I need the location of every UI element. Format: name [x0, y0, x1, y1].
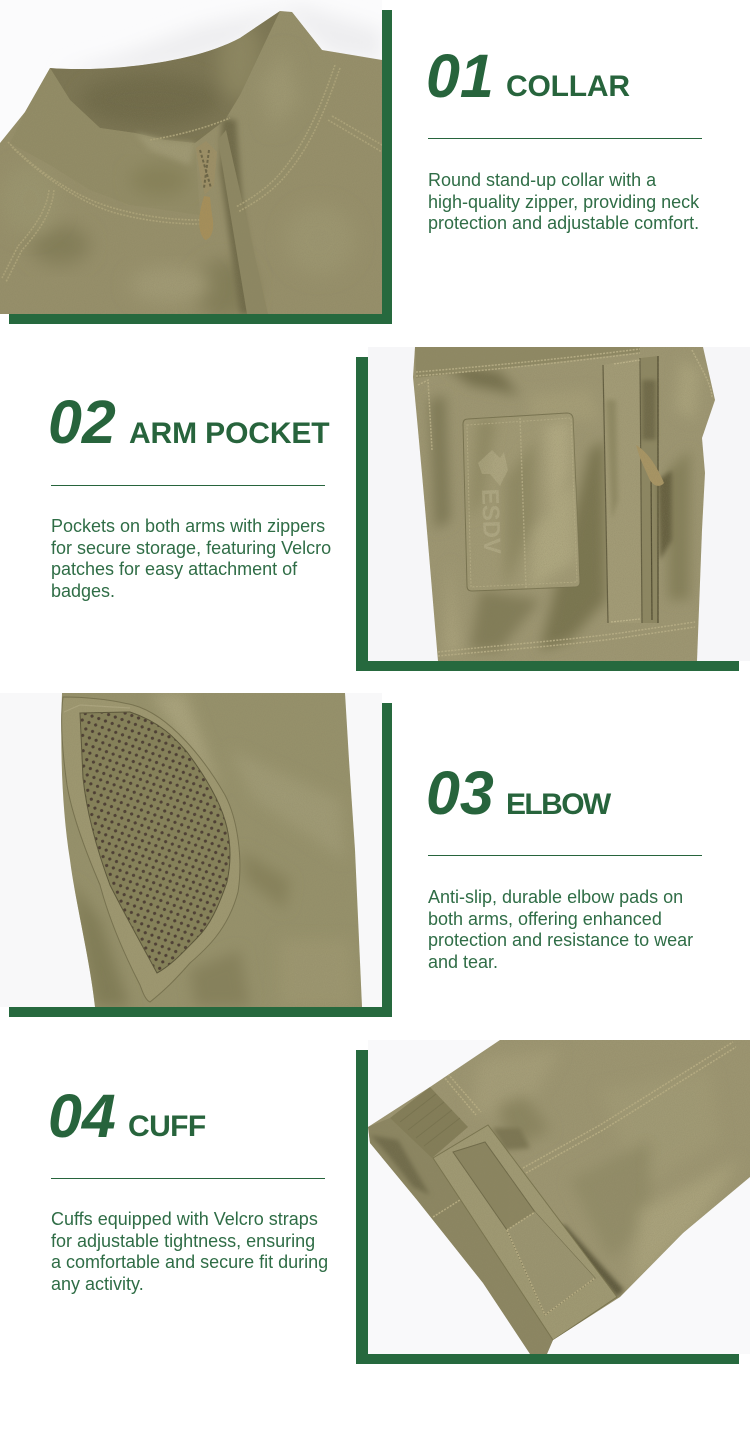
shadow beside strap	[557, 1225, 624, 1297]
section 3 text: elbow	[426, 759, 702, 972]
panel: collar photo	[0, 3, 392, 324]
photo: cuff with velcro strap	[368, 1040, 750, 1354]
description: arm pocket	[51, 516, 331, 601]
description: collar: high-quality zipper, providing neck	[428, 192, 699, 212]
logo mark	[478, 450, 508, 486]
description: arm pocket: for secure storage, featuring Velcro	[51, 538, 331, 558]
section 4 text: cuff	[48, 1082, 328, 1294]
description: elbow: both arms, offering enhanced	[428, 908, 662, 928]
description: arm pocket: badges.	[51, 580, 115, 600]
elastic band	[390, 1087, 468, 1158]
description: elbow	[428, 887, 693, 972]
number 02: 02	[48, 388, 116, 456]
heading: arm pocket: ARM POCKET	[129, 417, 329, 450]
elbow pad binding	[62, 697, 240, 1002]
description: collar: protection and adjustable comfort.	[428, 213, 699, 233]
stitching	[433, 1042, 736, 1315]
number 03: 03	[426, 759, 494, 827]
number 01: 01	[426, 42, 494, 110]
description: collar: Round stand-up collar with a	[428, 170, 656, 190]
photo: collar with zipper	[0, 3, 382, 314]
description: cuff: any activity.	[51, 1274, 144, 1294]
section 2 text: arm pocket	[48, 388, 331, 601]
patch	[463, 413, 580, 591]
green frame: arm pocket	[356, 357, 739, 671]
description: collar	[428, 170, 700, 233]
description: elbow: protection and resistance to wear	[428, 930, 693, 950]
number 04: 04	[48, 1082, 116, 1150]
elbow pad mesh with dots	[80, 712, 230, 973]
description: arm pocket: Pockets on both arms with zippers	[51, 516, 325, 536]
description: cuff: for adjustable tightness, ensuring	[51, 1230, 315, 1250]
stitch seams	[2, 65, 382, 282]
description: elbow: and tear.	[428, 952, 498, 972]
patch logo text: ESDV	[476, 488, 505, 555]
heading: elbow: ELBOW	[506, 788, 610, 821]
zipper pull	[636, 445, 664, 486]
panel: cuff photo	[356, 1040, 750, 1364]
zipper flap	[641, 356, 658, 623]
panel: elbow photo	[9, 693, 392, 1017]
heading: cuff: CUFF	[128, 1110, 206, 1143]
right collar leaf	[292, 12, 322, 50]
description: cuff: a comfortable and secure fit during	[51, 1252, 328, 1272]
description: cuff: Cuffs equipped with Velcro straps	[51, 1209, 318, 1229]
panel: arm pocket photo	[356, 347, 750, 671]
description: elbow: Anti-slip, durable elbow pads on	[428, 887, 683, 907]
green frame: elbow	[9, 703, 392, 1017]
heading: collar: COLLAR	[506, 70, 630, 103]
green frame: cuff	[356, 1050, 739, 1364]
cuff hem dark band	[368, 1118, 553, 1354]
photo: anti-slip elbow pad	[61, 693, 362, 1007]
green frame: collar	[9, 10, 392, 324]
strap	[433, 1125, 617, 1340]
description: arm pocket: patches for easy attachment of	[51, 559, 297, 579]
hem stitching	[416, 349, 712, 656]
description: cuff	[51, 1209, 328, 1294]
section 1 text: collar	[426, 42, 702, 233]
zipper	[216, 152, 217, 156]
photo: arm pocket with zipper and patch	[368, 347, 750, 661]
